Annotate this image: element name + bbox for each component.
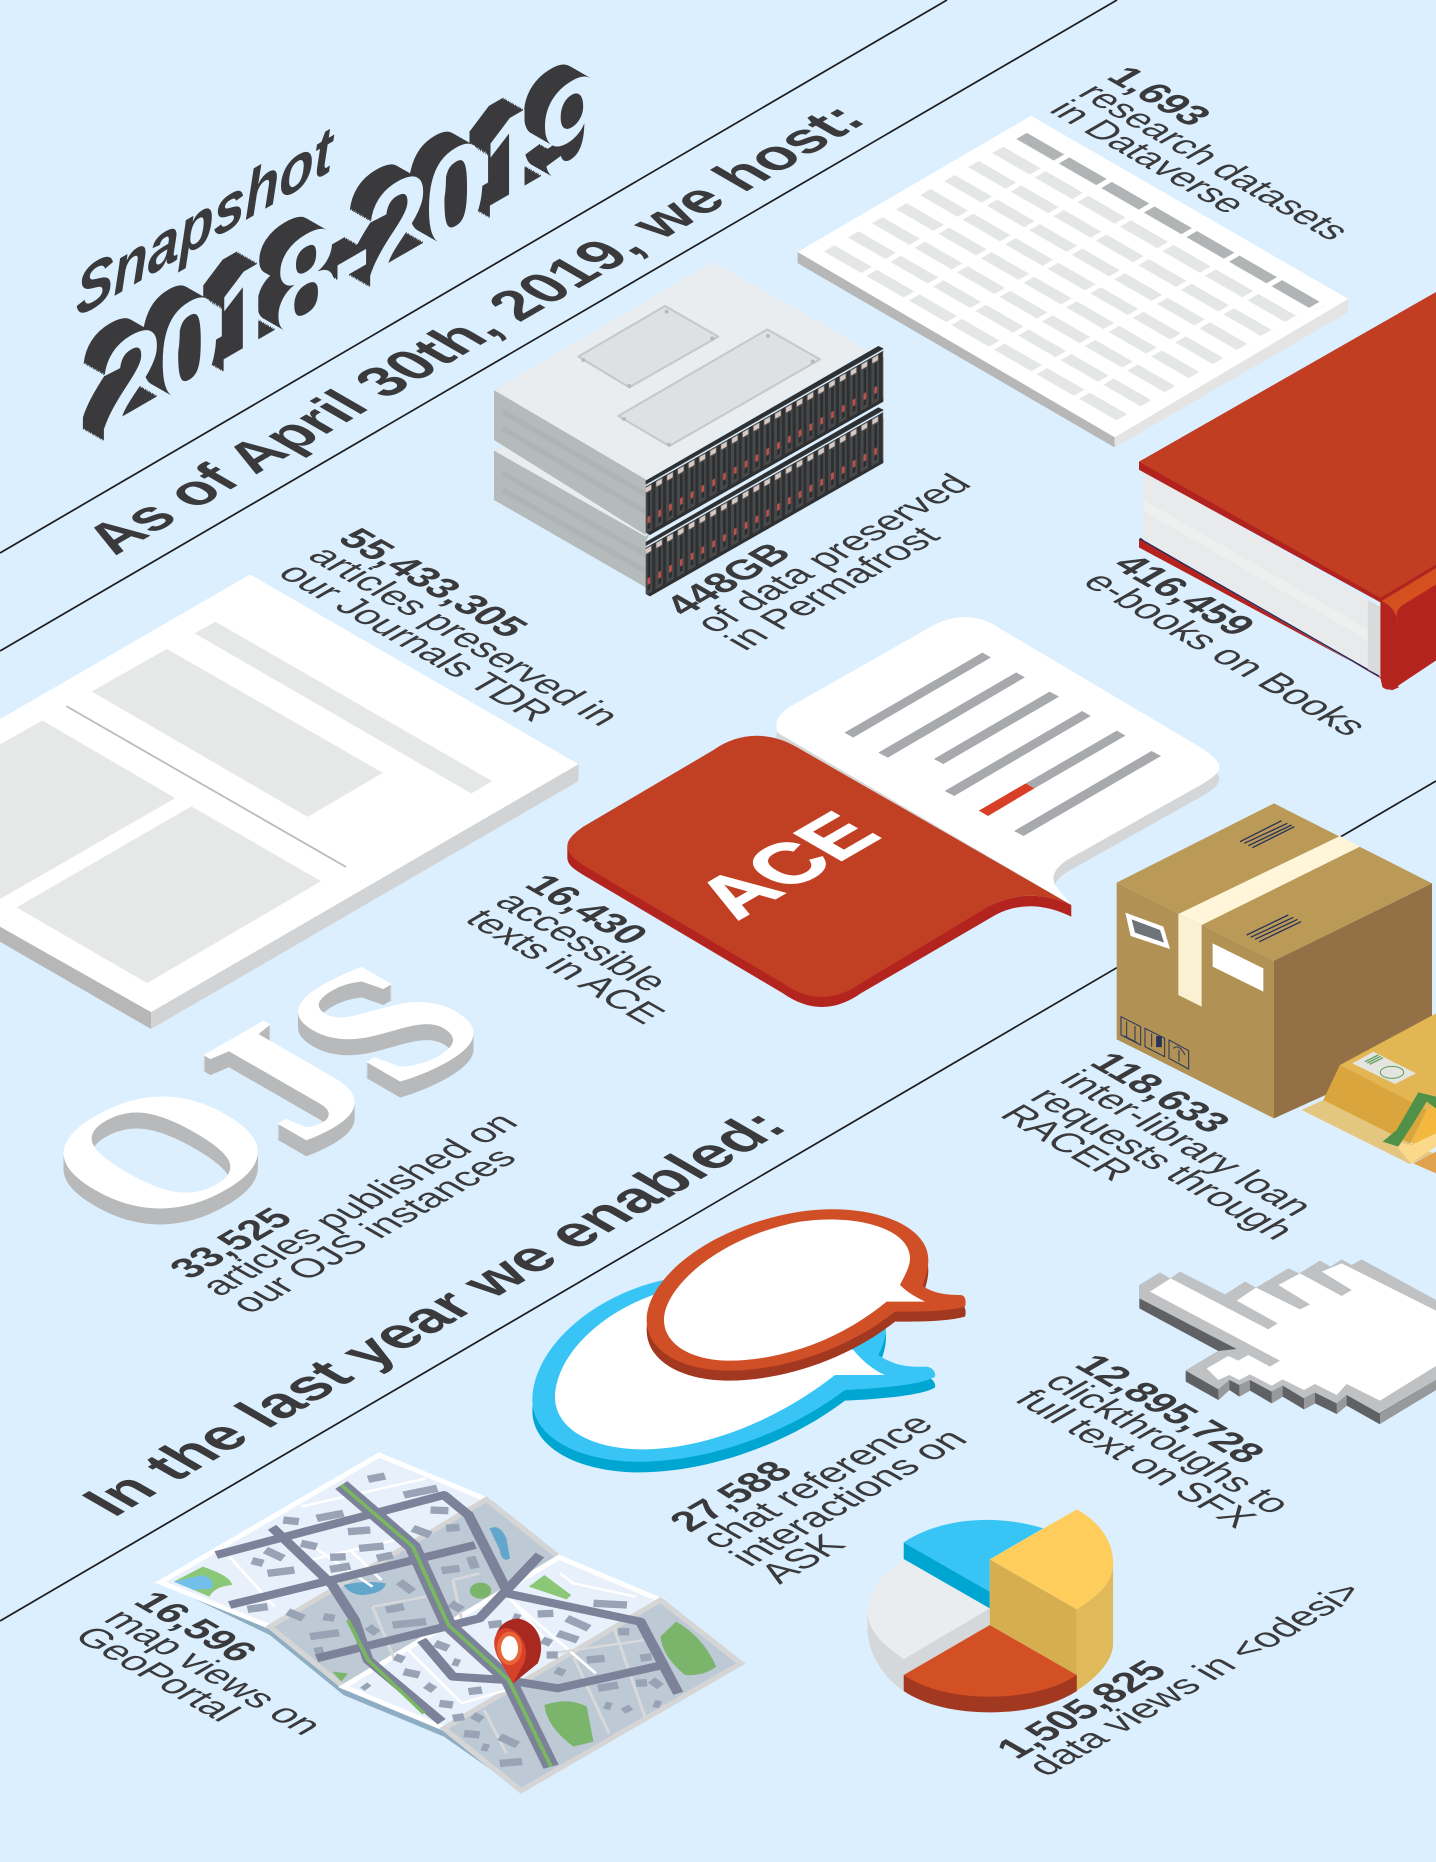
stat: RACER: inter-library loan (1050, 1065, 1323, 1222)
lower server (494, 407, 883, 596)
stat: ASK: chat reference (690, 1409, 943, 1555)
stat: SFX: 12,895,728 (1065, 1348, 1274, 1469)
upper server (494, 262, 883, 535)
stat: Permafrost: of data preserved (685, 468, 981, 639)
icon: cardboard box (RACER) (1117, 803, 1432, 1118)
parks and water (174, 1567, 716, 1747)
main roads (216, 1485, 678, 1767)
extruded years: 2018-2019 (100, 37, 600, 472)
handle slots (1240, 821, 1301, 942)
stat: GeoPortal: 16,596 (124, 1585, 267, 1668)
stat: RACER: 118,633 (1080, 1046, 1240, 1139)
stat: Dataverse: research datasets (1069, 78, 1360, 245)
heading: hosted as of April 30th: As of April 30th, 2019, we host: (69, 95, 879, 563)
parcel tape (1383, 1092, 1436, 1147)
stat: ASK: 27,588 (660, 1455, 802, 1538)
blue slice (904, 1520, 1043, 1608)
stat: Dataverse: in Dataverse (1041, 94, 1256, 219)
stat: Permafrost: 448GB (655, 537, 801, 622)
stat: Dataverse: 1,693 (1097, 60, 1221, 132)
address label (1213, 943, 1263, 992)
grey slice (868, 1558, 990, 1691)
icon: journal page (Journals TDR) (0, 574, 578, 1029)
stat: Journals TDR: our Journals TDR (268, 558, 562, 727)
heading: last year enabled: In the last year we enabled: (67, 1101, 801, 1525)
stat: ACE: 16,430 (515, 868, 658, 951)
title: Snapshot 2018-2019 (76, 37, 600, 472)
hand depth (1139, 1285, 1436, 1424)
stat: Permafrost: in Permafrost (715, 520, 950, 656)
buildings (248, 1476, 660, 1763)
minor streets (230, 1478, 636, 1703)
map panels (160, 1455, 486, 1627)
icon: ACE document (567, 617, 1219, 1007)
subtitle word Snapshot: Snapshot (76, 110, 334, 332)
red bubble (647, 1209, 966, 1381)
stat: ASK: interactions on (720, 1424, 977, 1572)
icon: yellow parcel (1302, 1013, 1436, 1173)
stat: SFX: full text on SFX (1005, 1384, 1265, 1534)
icon: server stack (Permafrost) (494, 262, 883, 596)
blue bubble (532, 1277, 935, 1472)
yellow slice (990, 1509, 1113, 1691)
stat: OJS: our OJS instances (221, 1143, 526, 1319)
stat: OJS: 33,525 (160, 1202, 302, 1285)
icon: red book (Books) (1139, 292, 1436, 690)
icon: folded street map (GeoPortal) (160, 1455, 741, 1791)
stat: GeoPortal: GeoPortal (64, 1621, 249, 1728)
stat: Books: 416,459 (1103, 548, 1265, 642)
handling symbols (1121, 1017, 1189, 1069)
text bars (844, 653, 1161, 836)
hand outline (1139, 1259, 1436, 1413)
stat: GeoPortal (64, 1585, 363, 1758)
stat: RACER: RACER (991, 1099, 1142, 1187)
stat: ACE: accessible (485, 886, 678, 998)
white document page (776, 617, 1219, 905)
stat: ASK: ASK (750, 1529, 855, 1589)
stat: ACE: texts in ACE (455, 903, 674, 1030)
stat: Dataverse (1041, 60, 1390, 262)
icon: pixel hand cursor (SFX) (1139, 1259, 1436, 1424)
icon: 3D pie chart (odesi) (868, 1509, 1113, 1712)
stat: SFX (1005, 1348, 1332, 1537)
stat: Journals TDR: 55,433,305 (328, 522, 537, 643)
stat: RACER: requests through (1020, 1082, 1304, 1246)
ACE logo text: ACE (675, 801, 898, 930)
packing tape (1178, 836, 1360, 925)
stat: GeoPortal: map views on (94, 1604, 332, 1741)
barcode label (1125, 913, 1170, 949)
red cover (567, 736, 1071, 997)
stat: odesi: 1,505,825 (986, 1655, 1177, 1765)
orange slice (904, 1625, 1077, 1712)
icon: chat bubbles (ASK) (532, 1209, 966, 1472)
document shadow (776, 629, 1219, 917)
stat: Journals TDR: articles preserved in (298, 541, 629, 732)
stat: Permafrost (655, 451, 1011, 656)
stat: ASK (660, 1389, 1007, 1589)
location pin (494, 1618, 541, 1683)
stat: odesi: data views in <odesi> (1017, 1576, 1373, 1782)
stat: Books: e-books on Books (1073, 566, 1377, 742)
stat: SFX: clickthroughs to (1035, 1367, 1300, 1520)
hand fill (1150, 1263, 1436, 1401)
red cover depth (567, 827, 1071, 1007)
icon: data table (Dataverse) (798, 116, 1348, 447)
highlighted bar (979, 783, 1034, 816)
map fold shadow (160, 1582, 521, 1791)
stat: RACER (991, 1046, 1365, 1263)
stat: OJS: articles published on (191, 1108, 528, 1302)
parcel label (1352, 1052, 1416, 1084)
stat: ACE (455, 868, 735, 1030)
